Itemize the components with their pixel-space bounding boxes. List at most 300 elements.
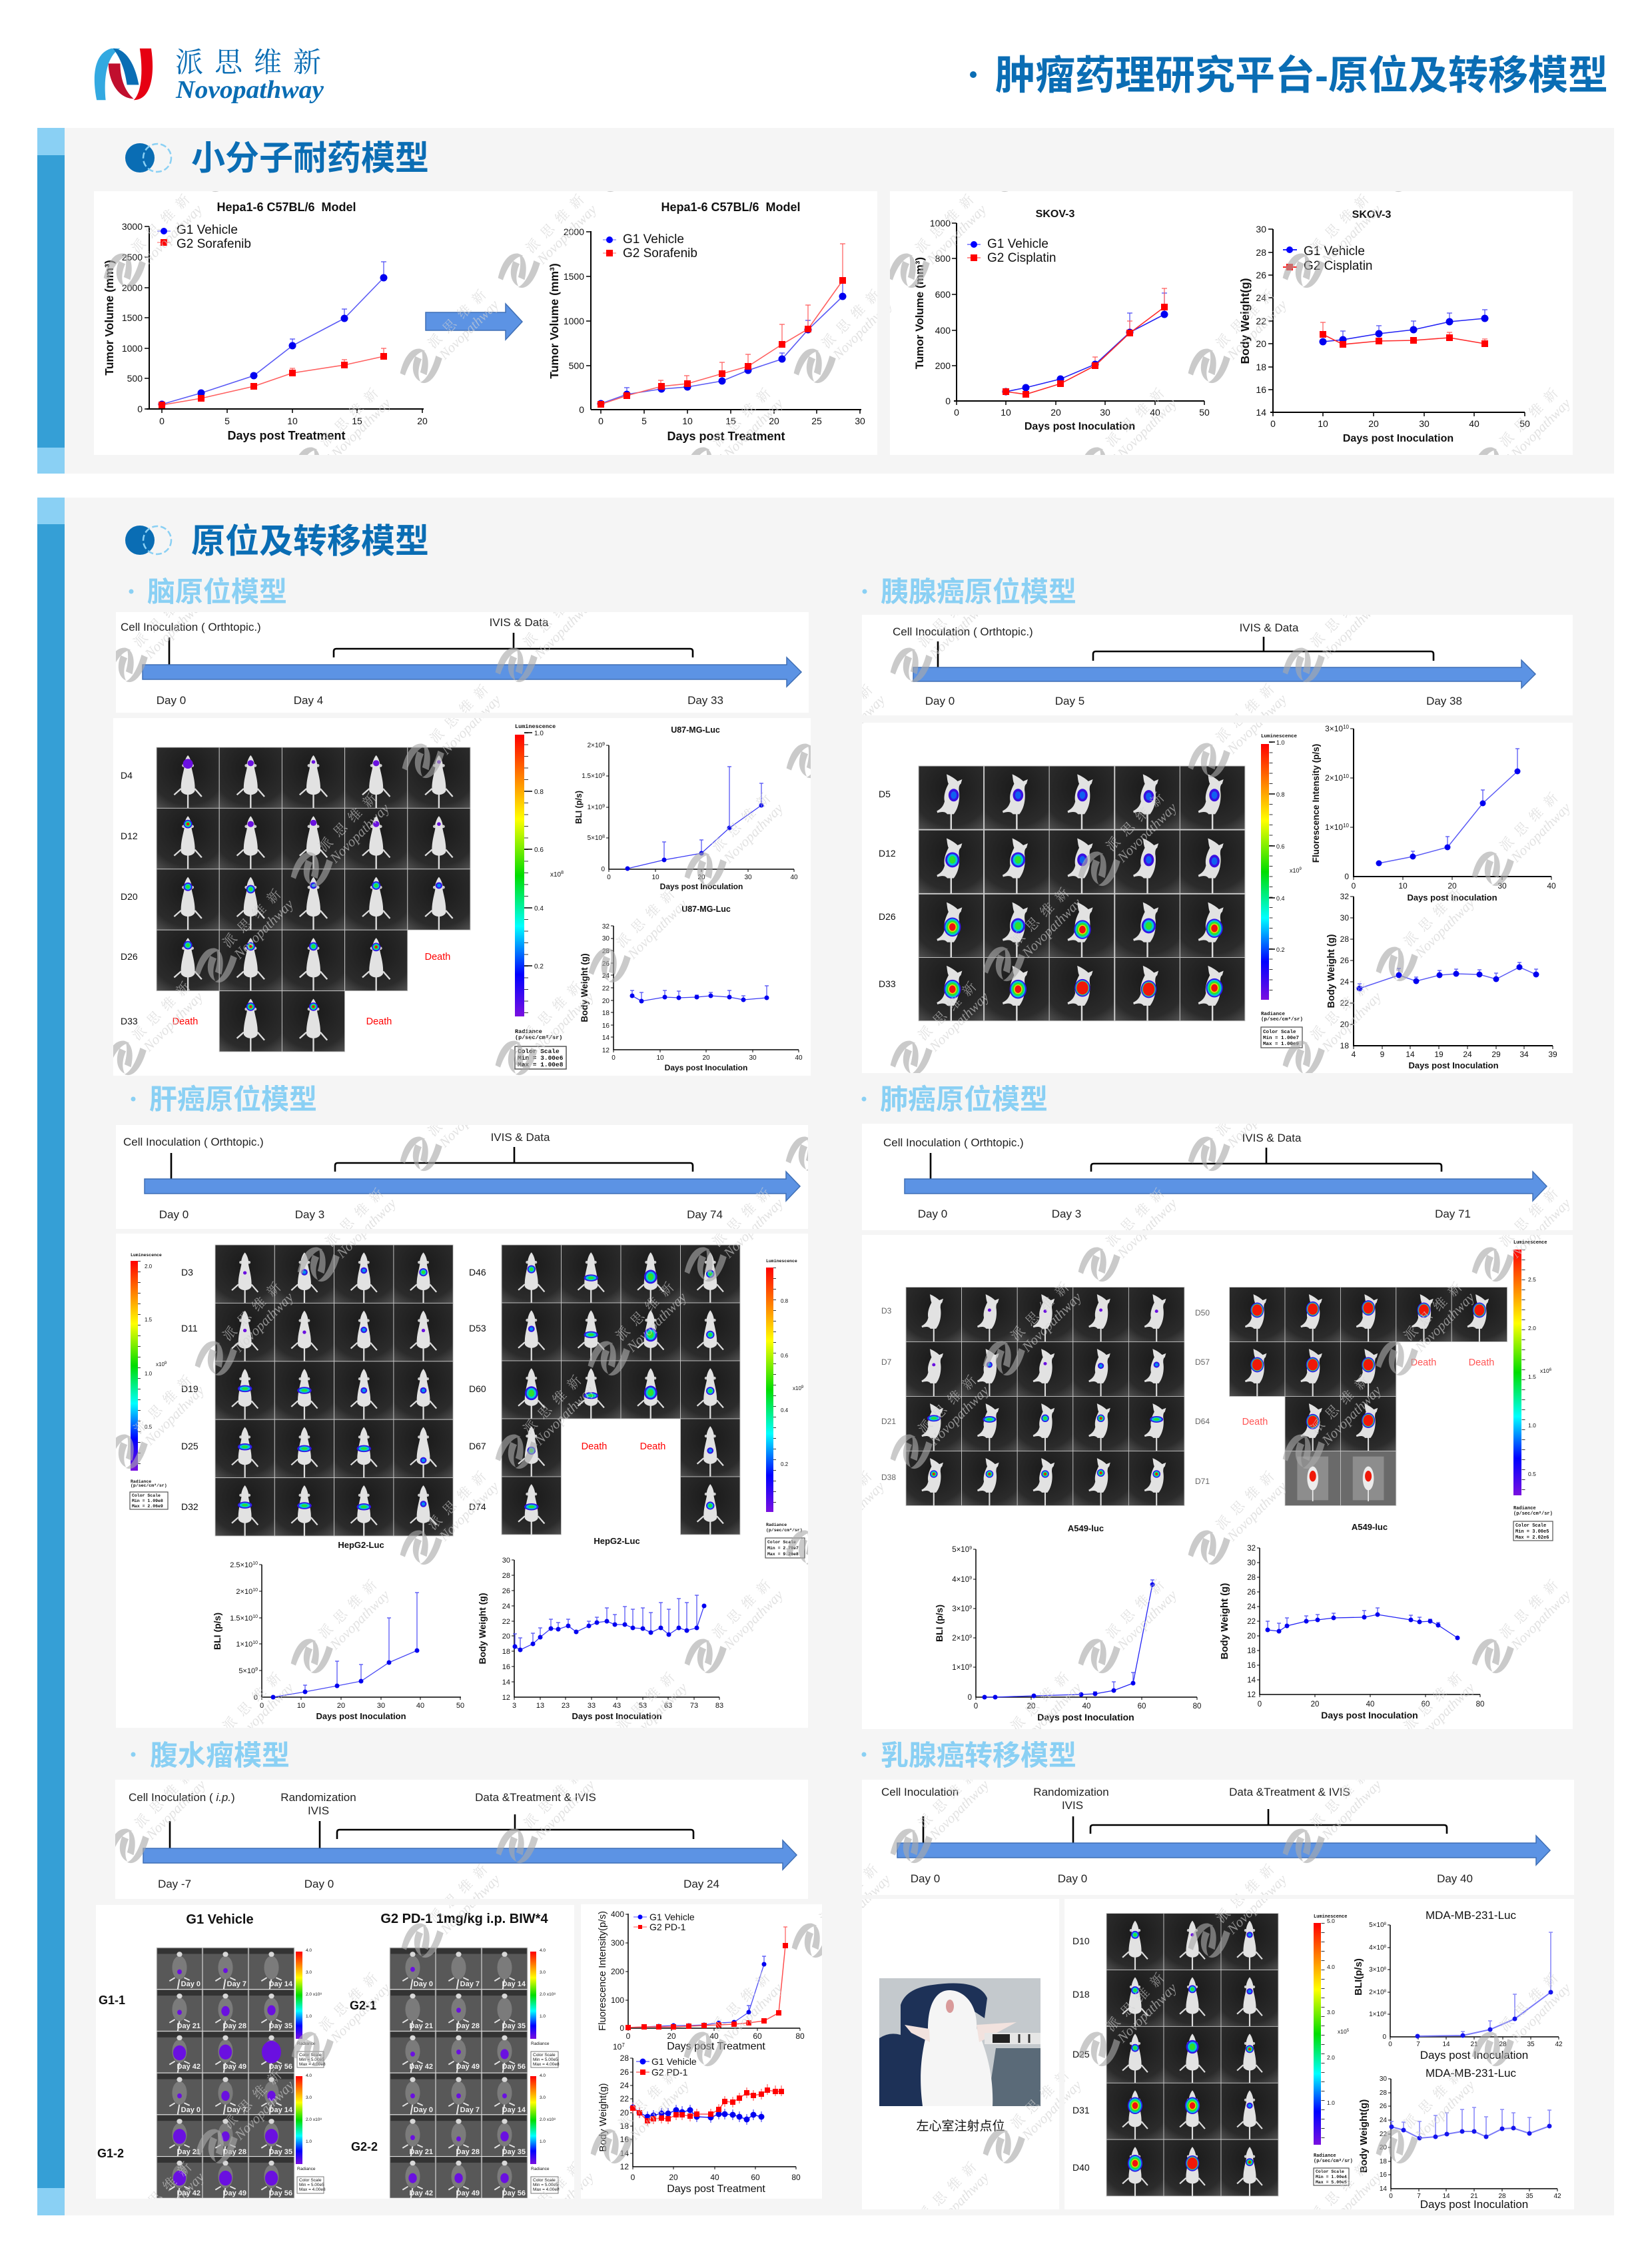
chart: Hepa1-6 sorafenib after: 5 bbox=[641, 416, 647, 426]
chart: pancreas body weight: 26 bbox=[1340, 956, 1349, 965]
chart: Hepa1-6 sorafenib after: 30 bbox=[855, 416, 865, 426]
timeline: ascites: Randomization bbox=[280, 1791, 356, 1804]
chart: lung body weight: 0 bbox=[1258, 1700, 1262, 1708]
timeline: liver bbox=[116, 1125, 808, 1229]
chart: lung BLI: A549-luc bbox=[1068, 1523, 1104, 1533]
color scale: liver left: 1.0 bbox=[145, 1371, 153, 1377]
color scales: ascites: Color Scale bbox=[533, 2178, 556, 2183]
imaging grid: lung D50-D71: D50 bbox=[1195, 1308, 1210, 1317]
chart: ascites body weight: 22 bbox=[620, 2094, 629, 2103]
chart: ascites body weight: 12 bbox=[620, 2162, 629, 2171]
chart: ascites body weight: 24 bbox=[620, 2081, 629, 2090]
imaging grid: brain: D33 bbox=[121, 1016, 138, 1026]
chart: ascites fluorescence: 100 bbox=[611, 1996, 624, 2005]
chart: SKOV-3 body weight: 18 bbox=[1256, 362, 1266, 372]
color scales: ascites: 4.0 bbox=[306, 1948, 312, 1953]
imaging grid: liver D3-D32: D19 bbox=[181, 1383, 199, 1394]
color scale: lung: 6 bbox=[1549, 1368, 1552, 1372]
color scales: ascites: 4.0 bbox=[306, 2073, 312, 2078]
chart: ascites body weight: Days post Treatment bbox=[667, 2183, 765, 2195]
color scale: brain: (p/sec/cm²/sr) bbox=[515, 1034, 562, 1041]
card: lung imaging and charts bbox=[862, 1235, 1573, 1729]
timeline: ascites: Day 0 bbox=[304, 1878, 334, 1890]
color scale: liver right: 0.2 bbox=[781, 1461, 789, 1467]
imaging grid: breast: D10 bbox=[1072, 1936, 1090, 1946]
chart: brain BLI: 10 bbox=[651, 874, 659, 881]
chart: pancreas body weight: 28 bbox=[1340, 934, 1349, 944]
chart: breast body weight: 22 bbox=[1380, 2131, 1387, 2138]
color scale: brain: x10 bbox=[550, 871, 561, 879]
imaging grid: G2: Day 21 bbox=[410, 2022, 433, 2030]
imaging grid: G1: Day 14 bbox=[269, 1980, 293, 1988]
imaging grid: pancreas bbox=[879, 766, 1245, 1021]
color scale: pancreas: (p/sec/cm²/sr) bbox=[1261, 1016, 1303, 1022]
chart: ascites body weight: 20 bbox=[669, 2173, 678, 2182]
color scales: ascites: Radiance bbox=[531, 2042, 550, 2046]
card: pancreas imaging and charts bbox=[862, 723, 1573, 1073]
heading: small molecule resistance: 小分子耐药模型 bbox=[191, 139, 429, 177]
color scale: brain: 0.6 bbox=[534, 847, 544, 854]
chart: ascites fluorescence: G2 PD-1 bbox=[649, 1922, 686, 1932]
chart: breast body weight: Body Weight(g) bbox=[1358, 2099, 1370, 2173]
imaging grid: liver D46-D74: D53 bbox=[469, 1323, 486, 1333]
chart: breast body weight: 21 bbox=[1470, 2193, 1478, 2200]
color scale: pancreas: 0.2 bbox=[1276, 946, 1285, 953]
chart: liver body weight: 24 bbox=[502, 1603, 510, 1611]
timeline: pancreas: Day 0 bbox=[925, 695, 955, 707]
chart: SKOV-3 tumor volume: SKOV-3 bbox=[1036, 208, 1074, 220]
chart: SKOV-3 body weight: Body Weight(g) bbox=[1238, 278, 1252, 364]
chart: liver BLI: 2.5×10 bbox=[230, 1561, 252, 1569]
chart: liver body weight: 13 bbox=[536, 1702, 544, 1710]
chart: liver BLI: HepG2-Luc bbox=[338, 1540, 384, 1550]
chart: breast body weight: 16 bbox=[1380, 2171, 1387, 2179]
chart: SKOV-3 tumor volume: 200 bbox=[935, 360, 951, 371]
imaging grid: G2: Day 28 bbox=[456, 2148, 480, 2156]
chart: SKOV-3 body weight: 28 bbox=[1256, 247, 1266, 258]
color scale: pancreas: 0.8 bbox=[1276, 791, 1285, 798]
imaging grid: lung D50-D71: D71 bbox=[1195, 1477, 1210, 1486]
chart: liver BLI: 50 bbox=[456, 1702, 464, 1710]
chart: SKOV-3 body weight: 0 bbox=[1270, 418, 1276, 429]
color scales: ascites: 2.0 x10⁸ bbox=[540, 2117, 556, 2122]
chart: Hepa1-6 sorafenib after: 2000 bbox=[564, 226, 584, 237]
color scales: ascites: 3.0 bbox=[306, 1970, 312, 1975]
chart: pancreas body weight: 32 bbox=[1340, 892, 1349, 901]
chart: SKOV-3 tumor volume: 0 bbox=[945, 396, 951, 406]
card: ascites imaging: G1-2 bbox=[97, 2147, 124, 2160]
chart: lung BLI: 9 bbox=[969, 1576, 972, 1581]
chart: breast BLI: 1×10 bbox=[1369, 2011, 1384, 2018]
chart: SKOV-3 body weight: 14 bbox=[1256, 407, 1266, 418]
imaging grid: lung D50-D71: Death bbox=[1242, 1417, 1268, 1427]
chart: breast body weight: 28 bbox=[1498, 2193, 1506, 2200]
chart: Hepa1-6 sorafenib after: 15 bbox=[725, 416, 736, 426]
imaging grid: lung D3-D38: D3 bbox=[881, 1306, 892, 1315]
chart: Hepa1-6 sorafenib after: 10 bbox=[682, 416, 693, 426]
chart: Hepa1-6 sorafenib after: 20 bbox=[769, 416, 779, 426]
chart: liver body weight: 3 bbox=[512, 1702, 516, 1710]
chart: liver body weight: 14 bbox=[502, 1679, 510, 1686]
color scale: lung: x10 bbox=[1540, 1367, 1549, 1374]
chart: pancreas fluorescence: 10 bbox=[1343, 773, 1350, 779]
chart: SKOV-3 body weight: 20 bbox=[1256, 338, 1266, 349]
chart: pancreas body weight: 20 bbox=[1340, 1020, 1349, 1029]
chart: liver BLI: 10 bbox=[252, 1588, 258, 1593]
chart: liver BLI: 40 bbox=[416, 1702, 424, 1710]
chart: pancreas body weight bbox=[1326, 892, 1557, 1070]
color scale: breast: 3.0 bbox=[1327, 2009, 1335, 2016]
chart: liver body weight: 53 bbox=[639, 1702, 647, 1710]
color scale: liver right: Min = 2.79e7 bbox=[767, 1546, 799, 1551]
timeline: ascites: Day 24 bbox=[683, 1878, 719, 1890]
color scales: ascites: 3.0 bbox=[540, 1970, 546, 1975]
color scales: ascites: 3.0 bbox=[306, 2095, 312, 2100]
chart: SKOV-3 body weight: 40 bbox=[1469, 418, 1479, 429]
card: brain imaging and charts bbox=[113, 718, 811, 1076]
chart: lung body weight: A549-luc bbox=[1352, 1522, 1388, 1532]
chart: pancreas body weight: 24 bbox=[1340, 977, 1349, 986]
imaging grid: brain: D26 bbox=[121, 951, 138, 962]
color scale: breast bbox=[1314, 1914, 1353, 2185]
imaging grid: G2: Day 14 bbox=[502, 1980, 526, 1988]
chart: SKOV-3 body weight: G1 Vehicle bbox=[1304, 244, 1365, 258]
color scale: breast: 1.0 bbox=[1327, 2099, 1335, 2106]
imaging grid: breast: D31 bbox=[1072, 2105, 1090, 2115]
timeline: brain: Day 33 bbox=[687, 694, 723, 707]
color scales: ascites: Min = 5.00e5 bbox=[299, 2183, 324, 2187]
imaging grid: G1: Day 21 bbox=[177, 2022, 201, 2030]
timeline: pancreas: Day 38 bbox=[1426, 695, 1462, 707]
chart: liver BLI: 0 bbox=[254, 1694, 258, 1702]
chart: liver body weight: 43 bbox=[613, 1702, 621, 1710]
chart: liver BLI: 30 bbox=[377, 1702, 385, 1710]
chart: breast body weight: 20 bbox=[1380, 2144, 1387, 2151]
chart: SKOV-3 body weight: Days post Inoculation bbox=[1343, 433, 1453, 444]
color scale: brain: Radiance bbox=[515, 1028, 542, 1035]
chart: brain body weight: 12 bbox=[602, 1047, 610, 1054]
chart: ascites fluorescence: 80 bbox=[795, 2032, 805, 2041]
chart: liver BLI: 10 bbox=[252, 1615, 258, 1619]
chart: pancreas fluorescence: 0 bbox=[1344, 872, 1349, 881]
chart: ascites body weight: 80 bbox=[791, 2173, 801, 2182]
chart: lung BLI: 5×10 bbox=[952, 1546, 969, 1554]
chart: ascites fluorescence: 40 bbox=[709, 2032, 719, 2041]
imaging grid: lung D3-D38: D21 bbox=[881, 1417, 896, 1426]
imaging grid: G1: Day 14 bbox=[269, 2106, 293, 2114]
chart: pancreas fluorescence: 40 bbox=[1547, 881, 1556, 891]
color scale: pancreas bbox=[1261, 734, 1303, 1048]
heading: orthotopic and metastasis: 原位及转移模型 bbox=[191, 522, 429, 560]
chart: brain body weight: 10 bbox=[656, 1054, 664, 1062]
timeline: brain: Cell Inoculation ( Orthtopic.) bbox=[121, 621, 261, 633]
color scale: pancreas: Max = 1.00e9 bbox=[1263, 1042, 1300, 1047]
imaging grid: G2: Day 42 bbox=[410, 2063, 433, 2071]
timeline: breast bbox=[862, 1780, 1574, 1895]
color scales: ascites: Radiance bbox=[297, 2167, 316, 2171]
chart: lung BLI bbox=[934, 1523, 1201, 1722]
color scale: lung: 1.0 bbox=[1528, 1422, 1536, 1429]
imaging grid: liver D46-D74: Death bbox=[640, 1441, 665, 1452]
chart: liver BLI: 10 bbox=[297, 1702, 305, 1710]
imaging grid: liver D3-D32 bbox=[181, 1245, 453, 1536]
chart: Hepa1-6 sorafenib before: 20 bbox=[417, 416, 428, 426]
section: ascites tumor bbox=[96, 1740, 822, 2199]
section: breast cancer metastasis bbox=[862, 1740, 1574, 2211]
chart: brain body weight: 30 bbox=[602, 935, 610, 942]
timeline: liver: Cell Inoculation ( Orthtopic.) bbox=[123, 1136, 264, 1148]
chart: Hepa1-6 sorafenib after bbox=[548, 200, 865, 443]
chart: liver BLI: 9 bbox=[255, 1667, 258, 1672]
timeline: lung: IVIS & Data bbox=[1242, 1132, 1302, 1144]
chart: Hepa1-6 sorafenib after: G1 Vehicle bbox=[623, 232, 684, 246]
chart: Hepa1-6 sorafenib after: Hepa1-6 C57BL/6 Model bbox=[661, 200, 801, 214]
timeline: breast: Day 40 bbox=[1437, 1872, 1473, 1885]
chart: lung body weight: 32 bbox=[1247, 1545, 1256, 1553]
chart: breast BLI: 8 bbox=[1384, 1922, 1387, 1926]
color scale: lung: Min = 3.00e5 bbox=[1515, 1529, 1549, 1535]
timeline: breast: Day 0 bbox=[911, 1872, 940, 1885]
chart: SKOV-3 tumor volume: G2 Cisplatin bbox=[987, 251, 1056, 265]
chart: Hepa1-6 sorafenib before: Hepa1-6 C57BL/6 Model bbox=[216, 200, 356, 214]
chart: Hepa1-6 sorafenib after: 25 bbox=[811, 416, 822, 426]
chart: breast BLI: 8 bbox=[1384, 2012, 1387, 2016]
chart: lung body weight: 28 bbox=[1247, 1574, 1256, 1582]
imaging grid: lung D50-D71: D64 bbox=[1195, 1417, 1210, 1426]
card: ascites imaging bbox=[96, 1905, 574, 2199]
color scale: liver left: 9 bbox=[165, 1361, 167, 1365]
chart: SKOV-3 tumor volume: Days post Inoculation bbox=[1025, 421, 1135, 432]
imaging grid: brain bbox=[121, 747, 470, 1052]
timeline: breast: IVIS bbox=[1062, 1799, 1083, 1812]
imaging grid: liver D3-D32: D3 bbox=[181, 1267, 193, 1278]
heading: ascites: 腹水瘤模型 bbox=[150, 1740, 290, 1771]
color scale: pancreas: x10 bbox=[1290, 867, 1300, 874]
chart: Hepa1-6 sorafenib before: G2 Sorafenib bbox=[177, 237, 251, 251]
color scale: breast: x10 bbox=[1338, 2028, 1347, 2035]
timeline: pancreas bbox=[862, 615, 1573, 715]
color scale: liver right: x10 bbox=[793, 1385, 801, 1391]
color scales: ascites: Min = 5.00e5 bbox=[299, 2057, 324, 2062]
chart: SKOV-3 tumor volume: 20 bbox=[1050, 407, 1061, 418]
chart: liver body weight: 20 bbox=[502, 1633, 510, 1641]
color scale: liver right bbox=[765, 1259, 805, 1558]
chart: brain BLI: 8 bbox=[602, 835, 605, 839]
chart: ascites body weight: 28 bbox=[620, 2054, 629, 2063]
chart: brain body weight: 20 bbox=[702, 1054, 710, 1062]
color scale: breast: 2.0 bbox=[1327, 2054, 1335, 2061]
imaging grid: G1: Day 0 bbox=[181, 1980, 201, 1988]
chart: brain BLI: Days post Inoculation bbox=[660, 882, 743, 891]
chart: liver body weight: 12 bbox=[502, 1694, 510, 1702]
imaging grid: G2: Day 14 bbox=[502, 2106, 526, 2114]
chart: lung BLI: Days post Inoculation bbox=[1037, 1712, 1134, 1722]
chart: lung BLI: 2×10 bbox=[952, 1635, 969, 1643]
chart: breast body weight: MDA-MB-231-Luc bbox=[1426, 2067, 1517, 2079]
imaging grid: G2: Day 0 bbox=[414, 2106, 433, 2114]
chart: liver BLI: 10 bbox=[252, 1641, 258, 1645]
chart: pancreas fluorescence: 30 bbox=[1497, 881, 1507, 891]
chart: ascites body weight: 16 bbox=[620, 2135, 629, 2144]
chart: breast body weight: 28 bbox=[1380, 2089, 1387, 2097]
timeline: ascites: Data &Treatment & IVIS bbox=[475, 1791, 596, 1804]
chart: brain body weight: 0 bbox=[612, 1054, 616, 1062]
imaging grid: lung D50-D71: Death bbox=[1411, 1357, 1436, 1368]
chart: Hepa1-6 sorafenib before: 2500 bbox=[122, 252, 143, 262]
chart: Hepa1-6 sorafenib before: 5 bbox=[224, 416, 230, 426]
imaging grid: pancreas: D5 bbox=[879, 789, 891, 799]
chart: pancreas body weight: 24 bbox=[1463, 1050, 1472, 1059]
chart: ascites body weight: 0 bbox=[631, 2173, 635, 2182]
card: ascites imaging: G1-1 bbox=[99, 1994, 125, 2007]
card: injection photo: 左心室注射点位 bbox=[916, 2119, 1005, 2133]
chart: liver body weight: 26 bbox=[502, 1587, 510, 1595]
chart: pancreas body weight: Body Weight (g) bbox=[1326, 934, 1337, 1008]
panel: small molecule resistance bbox=[37, 128, 1614, 474]
imaging grid: liver D3-D32: D25 bbox=[181, 1441, 199, 1451]
chart: brain BLI: 30 bbox=[744, 874, 752, 881]
chart: pancreas fluorescence: 1×10 bbox=[1325, 823, 1343, 832]
chart: breast BLI: 0 bbox=[1382, 2034, 1386, 2041]
chart: Hepa1-6 sorafenib before: 10 bbox=[287, 416, 298, 426]
color scales: ascites: Color Scale bbox=[533, 2053, 556, 2057]
color scale: pancreas: 9 bbox=[1300, 867, 1302, 871]
chart: breast BLI: Days post Inoculation bbox=[1420, 2049, 1528, 2061]
timeline: liver: Day 0 bbox=[159, 1208, 189, 1221]
color scale: liver left: Radiance bbox=[131, 1479, 151, 1484]
timeline: brain: Day 0 bbox=[157, 694, 186, 707]
imaging grid: G1: Day 35 bbox=[269, 2148, 292, 2156]
chart: breast BLI bbox=[1353, 1909, 1563, 2061]
color scales: ascites: 4.0 bbox=[540, 2073, 546, 2078]
timeline: ascites: IVIS bbox=[308, 1804, 329, 1817]
timeline: breast: Randomization bbox=[1033, 1786, 1109, 1798]
imaging grid: lung D50-D71 bbox=[1195, 1287, 1507, 1505]
card: ascites charts bbox=[581, 1904, 822, 2199]
imaging grid: liver D46-D74: D67 bbox=[469, 1441, 486, 1451]
logo: Novopathway: 派思维新 bbox=[175, 41, 332, 81]
color scale: breast: 4.0 bbox=[1327, 1964, 1335, 1970]
chart: breast BLI: 0 bbox=[1388, 2041, 1392, 2048]
color scales: ascites: 1.0 bbox=[306, 2014, 312, 2019]
color scale: brain: Max = 1.00e8 bbox=[518, 1061, 564, 1068]
chart: brain body weight: Body Weight (g) bbox=[580, 953, 590, 1022]
color scale: lung: Color Scale bbox=[1515, 1523, 1546, 1529]
chart: brain BLI: U87-MG-Luc bbox=[671, 725, 720, 735]
chart: brain body weight: 40 bbox=[795, 1054, 803, 1062]
chart: brain body weight: 14 bbox=[602, 1034, 610, 1042]
chart: liver BLI: 5×10 bbox=[238, 1667, 255, 1675]
imaging grid: pancreas: D33 bbox=[879, 978, 896, 989]
chart: lung body weight: 18 bbox=[1247, 1647, 1256, 1655]
timeline: brain: IVIS & Data bbox=[490, 616, 549, 629]
chart: liver body weight: 22 bbox=[502, 1618, 510, 1626]
card: breast imaging and charts bbox=[1064, 1899, 1574, 2211]
color scale: liver left bbox=[130, 1253, 168, 1509]
color scale: pancreas: Min = 1.00e7 bbox=[1263, 1036, 1299, 1041]
color scale: brain: Luminescence bbox=[515, 723, 556, 730]
chart: SKOV-3 body weight: 16 bbox=[1256, 384, 1266, 395]
chart: Hepa1-6 sorafenib before: Days post Treatment bbox=[227, 429, 346, 442]
chart: breast BLI: 3×10 bbox=[1369, 1966, 1384, 1974]
color scales: ascites: 1.0 bbox=[540, 2139, 546, 2144]
color scales: ascites: Min = 5.00e5 bbox=[533, 2057, 558, 2062]
chart: breast BLI: 8 bbox=[1384, 1945, 1387, 1949]
chart: Hepa1-6 sorafenib before: 2000 bbox=[122, 282, 143, 293]
imaging grid: G2: Day 21 bbox=[410, 2148, 433, 2156]
chart: liver BLI bbox=[212, 1540, 464, 1721]
chart: pancreas fluorescence bbox=[1311, 724, 1556, 903]
chart: ascites body weight: G2 PD-1 bbox=[651, 2067, 688, 2077]
chart: lung BLI: 9 bbox=[969, 1664, 972, 1669]
chart: SKOV-3 body weight: 20 bbox=[1368, 418, 1379, 429]
chart: lung BLI: 4×10 bbox=[952, 1576, 969, 1584]
chart: pancreas body weight: 19 bbox=[1434, 1050, 1444, 1059]
chart: pancreas body weight: 9 bbox=[1380, 1050, 1385, 1059]
color scale: liver right: Luminescence bbox=[766, 1259, 797, 1264]
color scale: pancreas: Color Scale bbox=[1263, 1030, 1296, 1035]
imaging grid: lung D3-D38: D7 bbox=[881, 1357, 892, 1367]
timeline: ascites bbox=[115, 1780, 808, 1899]
chart: lung body weight: 12 bbox=[1247, 1691, 1256, 1699]
color scale: brain: 0.8 bbox=[534, 789, 544, 796]
chart: liver body weight: HepG2-Luc bbox=[594, 1536, 640, 1546]
imaging grid: lung D3-D38 bbox=[881, 1287, 1184, 1505]
color scale: lung: 0.5 bbox=[1528, 1471, 1536, 1477]
chart: SKOV-3 body weight bbox=[1238, 209, 1530, 444]
chart: Hepa1-6 sorafenib after: 1500 bbox=[564, 271, 584, 282]
imaging grid: pancreas: D26 bbox=[879, 911, 896, 922]
chart: pancreas body weight: 29 bbox=[1491, 1050, 1501, 1059]
color scale: liver left: 2.0 bbox=[145, 1264, 153, 1270]
chart: pancreas body weight: 34 bbox=[1519, 1050, 1529, 1059]
chart: breast body weight: 0 bbox=[1389, 2193, 1393, 2200]
chart: pancreas fluorescence: 10 bbox=[1343, 823, 1350, 829]
imaging grid: G1: Day 7 bbox=[227, 1980, 246, 1988]
heading: breast: 乳腺癌转移模型 bbox=[881, 1740, 1076, 1771]
imaging grid: liver D46-D74: Death bbox=[582, 1441, 607, 1452]
imaging grid: G2: Day 42 bbox=[410, 2189, 433, 2197]
color scale: liver right: Max = 9.26e8 bbox=[767, 1552, 799, 1557]
timeline: brain bbox=[116, 612, 809, 713]
chart: breast BLI: BLI(p/s) bbox=[1353, 1958, 1364, 1996]
chart: SKOV-3 body weight: 26 bbox=[1256, 270, 1266, 280]
chart: liver body weight: Days post Inoculation bbox=[572, 1711, 662, 1721]
chart: SKOV-3 body weight: 10 bbox=[1318, 418, 1328, 429]
color scale: lung bbox=[1513, 1240, 1553, 1541]
chart: breast body weight: 14 bbox=[1380, 2185, 1387, 2193]
chart: ascites fluorescence: 20 bbox=[667, 2032, 676, 2041]
page title: 肿瘤药理研究平台-原位及转移模型 bbox=[995, 53, 1608, 98]
timeline: liver: IVIS & Data bbox=[491, 1131, 550, 1144]
color scale: pancreas: 0.6 bbox=[1276, 843, 1285, 850]
color scales: ascites: 3.0 bbox=[540, 2095, 546, 2100]
chart: liver body weight: 63 bbox=[664, 1702, 672, 1710]
chart: Hepa1-6 sorafenib before: 1500 bbox=[122, 312, 143, 323]
chart: breast BLI: 35 bbox=[1527, 2041, 1535, 2048]
color scale: lung: Radiance bbox=[1513, 1506, 1536, 1511]
chart: Hepa1-6 sorafenib before bbox=[103, 200, 428, 442]
color scale: breast: Max = 5.00e5 bbox=[1316, 2180, 1347, 2185]
chart: brain BLI: 20 bbox=[697, 874, 705, 881]
card: ascites imaging: G2-1 bbox=[350, 1999, 376, 2012]
imaging grid: liver D46-D74: D74 bbox=[469, 1501, 486, 1512]
chart: ascites fluorescence: 0 bbox=[626, 2032, 631, 2041]
chart: SKOV-3 tumor volume: G1 Vehicle bbox=[987, 237, 1048, 251]
chart: breast body weight: 14 bbox=[1442, 2193, 1450, 2200]
chart: lung body weight: 22 bbox=[1247, 1618, 1256, 1626]
chart: lung body weight: 40 bbox=[1366, 1700, 1374, 1708]
